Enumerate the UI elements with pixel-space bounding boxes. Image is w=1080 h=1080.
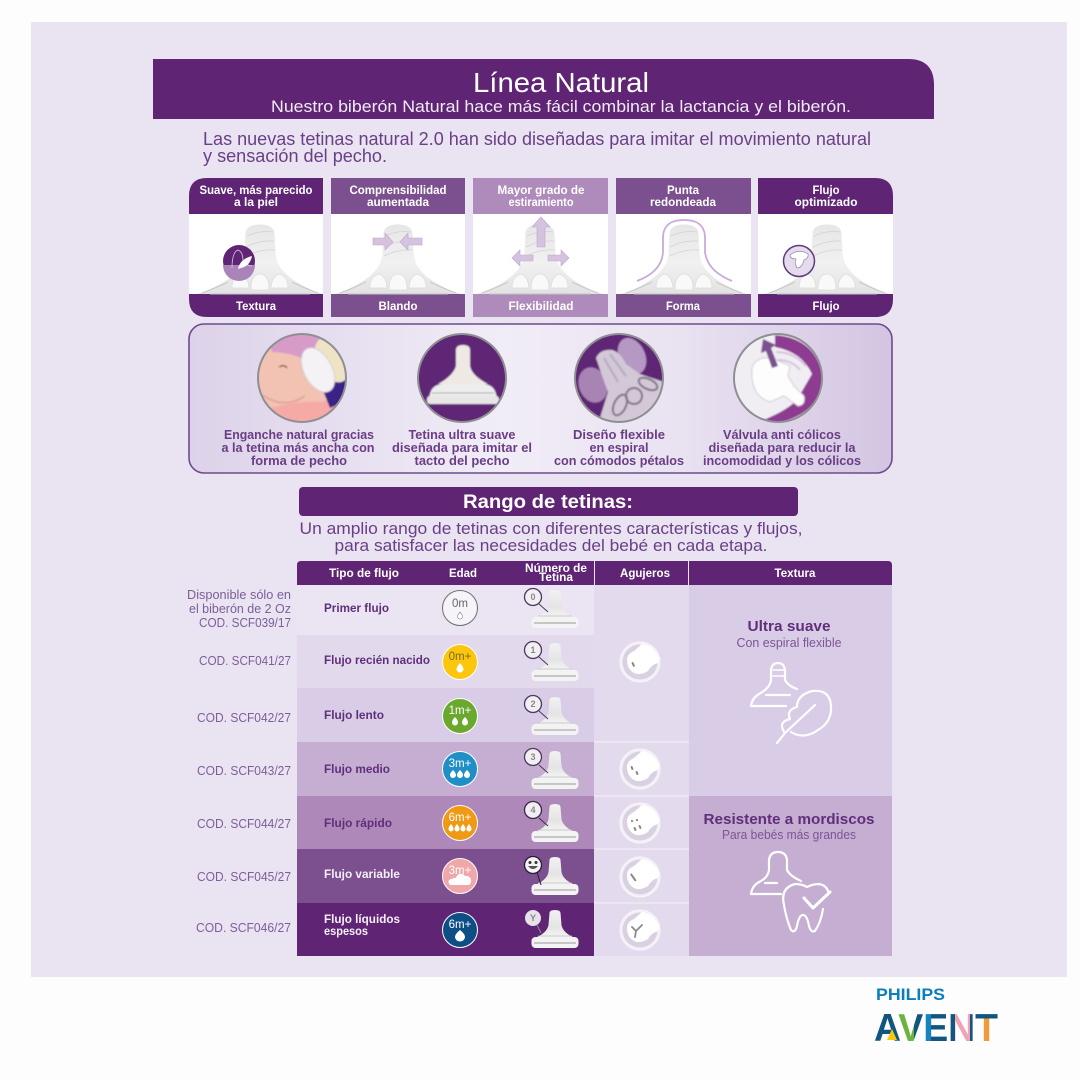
texture: ultra soft: Con espiral flexible	[736, 636, 842, 650]
caption: ultra soft: Tetina ultra suave	[408, 427, 516, 442]
panel: feature card Flujo: Flujo	[812, 185, 840, 197]
caption: ultra soft: diseñada para imitar el	[392, 440, 532, 455]
teat number 4: 4	[530, 805, 536, 815]
caption: flexible design: con cómodos pétalos	[554, 453, 684, 468]
intro text: y sensación del pecho.	[203, 146, 387, 166]
teat number 3: 3	[530, 752, 536, 762]
table header: Tipo de flujo	[329, 568, 399, 580]
product codes: COD. SCF044/27	[197, 816, 291, 831]
caption: anti-colic valve: incomodidad y los cólicos	[703, 453, 861, 468]
flow type labels	[324, 603, 430, 938]
photo: baby feeding	[257, 333, 347, 423]
teat number 1	[524, 642, 578, 681]
table: teat range	[187, 561, 892, 956]
hole icon: two holes	[620, 749, 660, 789]
icon: stretch arrows	[512, 217, 569, 266]
flow type labels: Flujo líquidos	[324, 914, 400, 926]
table header: Tetina	[539, 572, 574, 584]
age badge: 0m: 0m	[452, 598, 468, 610]
range description: Un amplio rango de tetinas con diferentes características y flujos,	[300, 520, 802, 538]
age badge: 3m+ blue: 3m+	[449, 758, 472, 770]
heading: Rango de tetinas	[299, 487, 798, 516]
age badge: 3m+ pink	[442, 858, 478, 894]
age badge: 1m+: 1m+	[449, 705, 472, 717]
panel: feature card Blando: aumentada	[367, 197, 430, 209]
caption: anti-colic valve: Válvula anti cólicos	[723, 427, 841, 442]
teat number 0	[524, 588, 578, 628]
teat Y thick	[525, 910, 578, 948]
panel: feature card Flexibilidad: Mayor grado de	[498, 185, 584, 197]
caption: natural latch: forma de pecho	[251, 453, 347, 468]
age badge: 6m+ navy	[442, 912, 478, 948]
product codes: COD. SCF045/27	[197, 869, 291, 884]
panel: feature card Forma: Forma	[666, 301, 701, 313]
age badge: 1m+	[442, 698, 478, 734]
icon: flow valve	[784, 246, 814, 276]
caption: natural latch: Enganche natural gracias	[224, 427, 374, 442]
caption: natural latch: a la tetina más ancha con	[222, 440, 375, 455]
photo: anti-colic valve	[733, 333, 823, 423]
table header: Textura	[774, 568, 816, 580]
flow type labels: Primer flujo	[324, 603, 389, 615]
hole icon: four holes	[620, 803, 660, 843]
panel: feature card Flujo: Flujo	[812, 301, 840, 313]
product codes: el biberón de 2 Oz	[189, 601, 291, 616]
age badge: 6m+ orange: 6m+	[449, 812, 472, 824]
texture: bite resistant: Para bebés más grandes	[722, 828, 856, 842]
panel: feature card Blando: Comprensibilidad	[350, 185, 446, 197]
panel: feature card Flujo: optimizado	[794, 197, 858, 209]
icon: rounded shape outline	[637, 220, 732, 281]
panel: feature card Flexibilidad: estiramiento	[508, 197, 574, 209]
teat number 3	[524, 748, 578, 789]
photo: ultra soft teat	[417, 333, 507, 423]
caption: ultra soft	[392, 427, 532, 468]
hole icon: Y cut	[620, 910, 660, 950]
intro text: Las nuevas tetinas natural 2.0 han sido diseñadas para imitar el movimiento natural	[203, 129, 871, 149]
product codes: COD. SCF041/27	[199, 653, 291, 668]
panel: feature card Textura: Suave, más parecido	[200, 185, 312, 197]
product codes: COD. SCF042/27	[197, 710, 291, 725]
flow type labels: espesos	[324, 926, 368, 938]
product codes: COD. SCF043/27	[197, 763, 291, 778]
texture: bite resistant: Resistente a mordiscos	[704, 811, 874, 828]
texture: ultra soft: Ultra suave	[748, 618, 830, 635]
panel: feature card Flexibilidad: Flexibilidad	[508, 301, 574, 313]
product codes: COD. SCF046/27	[196, 920, 291, 935]
caption: anti-colic valve	[703, 427, 861, 468]
panel: benefits	[189, 324, 892, 473]
flow type labels: Flujo rápido	[324, 818, 392, 830]
panel: feature card Textura: Textura	[236, 301, 277, 313]
product codes	[187, 587, 291, 935]
flow type labels: Flujo lento	[324, 710, 384, 722]
panel: feature card Textura	[189, 178, 323, 317]
photo: flexible spiral	[574, 333, 664, 424]
title banner: Nuestro biberón Natural hace más fácil combinar la lactancia y el biberón.	[271, 97, 851, 116]
teat number 4	[524, 802, 578, 842]
logo: Philips Avent	[874, 986, 998, 1050]
flow type labels: Flujo medio	[324, 764, 390, 776]
age badge: 0m+	[442, 644, 478, 680]
icon: teat with feather	[751, 663, 831, 743]
logo: Philips Avent: PHILIPS	[876, 986, 945, 1004]
caption: anti-colic valve: diseñada para reducir la	[708, 440, 856, 455]
teat number 0: 0	[530, 592, 536, 602]
panel: feature card Blando: Blando	[378, 301, 418, 313]
hole icon: one hole	[620, 642, 660, 682]
age badge: 0m	[442, 590, 478, 626]
caption: flexible design	[554, 427, 684, 468]
icon: feather texture	[223, 245, 255, 281]
product codes: COD. SCF039/17	[199, 615, 291, 630]
age badge: 3m+ pink: 3m+	[449, 865, 472, 877]
texture: ultra soft	[736, 618, 842, 743]
panel: feature card Flexibilidad	[473, 178, 608, 317]
table header: Edad	[449, 568, 477, 580]
caption: ultra soft: tacto del pecho	[414, 453, 510, 468]
flow type labels: Flujo recién nacido	[324, 655, 430, 667]
caption: flexible design: Diseño flexible	[573, 427, 665, 442]
age badge: 3m+ blue	[442, 752, 478, 786]
panel: feature card Textura: a la piel	[234, 197, 278, 209]
logo: Philips Avent: AVENT	[874, 1007, 998, 1050]
panel: feature card Blando	[331, 178, 465, 317]
age badge: 6m+ navy: 6m+	[449, 919, 472, 931]
row backgrounds	[297, 585, 892, 956]
teat Y thick: Y	[530, 913, 536, 923]
age badge: 6m+ orange	[442, 806, 478, 840]
panel: feature card Forma	[616, 178, 751, 317]
caption: natural latch	[222, 427, 375, 468]
flow type labels: Flujo variable	[324, 869, 400, 881]
range description	[300, 520, 802, 555]
panel: feature card Flujo	[758, 178, 893, 317]
panel: feature card Forma: redondeada	[650, 197, 717, 209]
title banner: Línea Natural	[473, 67, 649, 98]
teat number 1: 1	[530, 645, 536, 655]
texture: bite resistant	[704, 811, 874, 931]
table header	[297, 561, 892, 585]
intro text	[203, 129, 871, 166]
teat number 2	[524, 696, 578, 735]
caption: flexible design: en espiral	[590, 440, 648, 455]
product codes: Disponible sólo en	[187, 587, 291, 602]
range description: para satisfacer las necesidades del bebé en cada etapa.	[334, 537, 768, 555]
hole icon: slit	[620, 857, 660, 897]
teat smiley variable	[524, 856, 578, 895]
teat number 2: 2	[530, 699, 536, 709]
table header: Agujeros	[620, 568, 670, 580]
age badge: 0m+: 0m+	[449, 651, 472, 663]
icon: teat with tooth	[751, 852, 830, 931]
title banner	[153, 59, 934, 119]
icon: compression arrows	[373, 233, 422, 250]
heading: Rango de tetinas: Rango de tetinas:	[463, 492, 633, 513]
panel: feature card Forma: Punta	[667, 185, 700, 197]
table header: Número de	[525, 563, 587, 575]
